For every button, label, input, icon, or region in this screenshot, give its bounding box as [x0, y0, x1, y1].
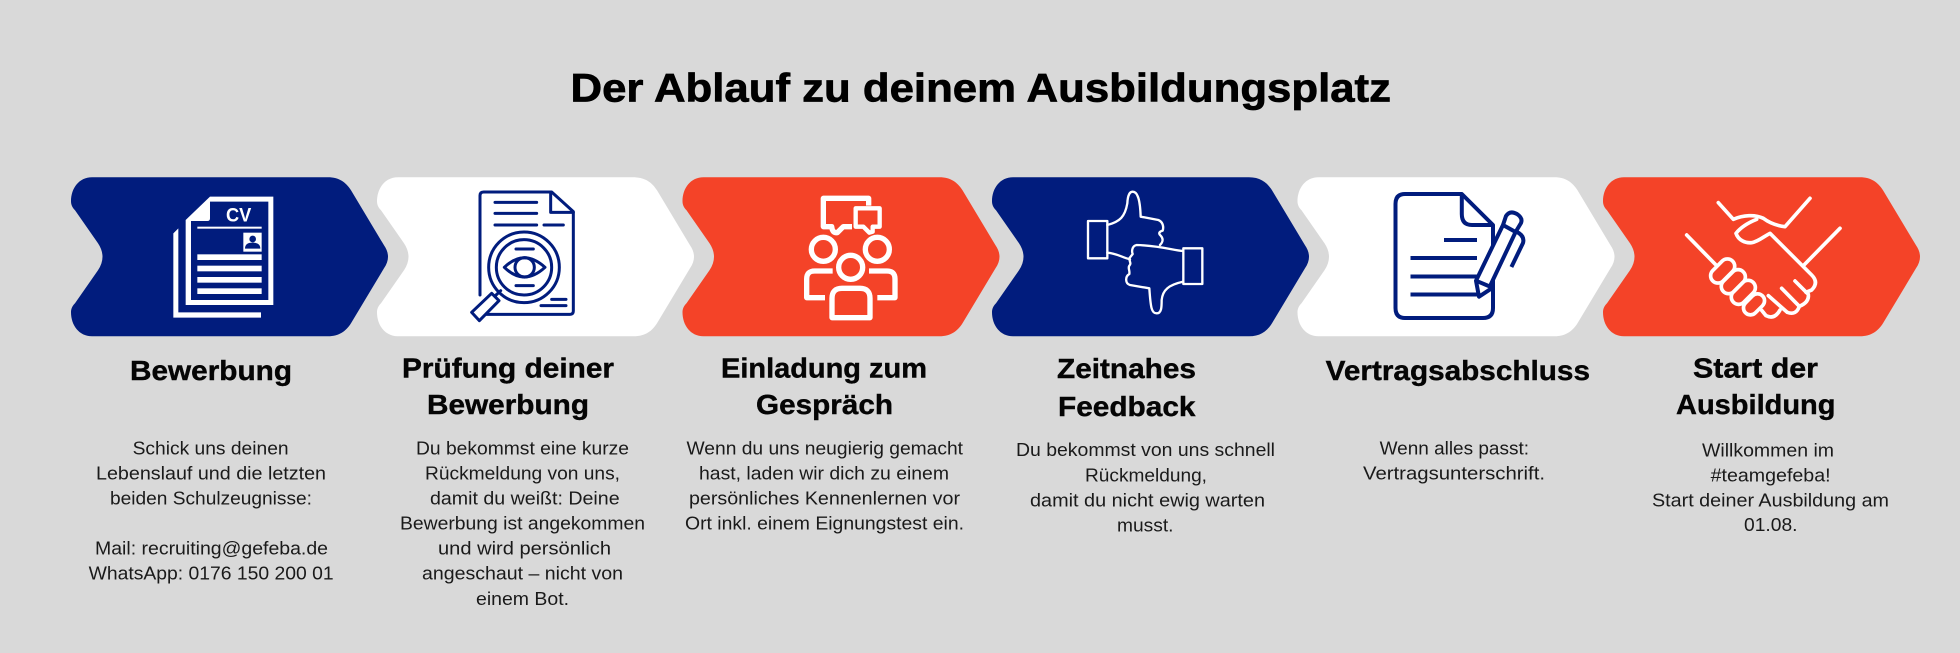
- chevron: step 6: [1603, 177, 1920, 336]
- icon: CV document: CV: [226, 206, 251, 227]
- text: step 1: [89, 437, 334, 583]
- heading: step 4: [1057, 353, 1196, 422]
- heading: step 6: Ausbildung: [1676, 389, 1836, 420]
- text: step 5: Wenn alles passt:: [1380, 437, 1529, 458]
- text: step 5: Vertragsunterschrift.: [1363, 462, 1545, 483]
- heading: step 3: Einladung zum: [721, 352, 927, 383]
- chevron: step 4: [992, 177, 1309, 336]
- text: step 4: damit du nicht ewig warten: [1030, 490, 1265, 511]
- icon: handshake: [1687, 198, 1840, 318]
- text: step 3: hast, laden wir dich zu einem: [699, 462, 949, 483]
- text: step 1: WhatsApp: 0176 150 200 01: [89, 562, 334, 583]
- title: Der Ablauf zu deinem Ausbildungsplatz: [570, 67, 1391, 111]
- text: step 2: [400, 437, 645, 609]
- heading: step 4: Zeitnahes: [1057, 353, 1196, 384]
- panel: step 1 Bewerbung: [71, 177, 388, 583]
- heading: step 3: Gespräch: [756, 389, 893, 420]
- panel: step 2 Pruefung: [377, 177, 694, 609]
- text: step 1: Mail: recruiting@gefeba.de: [95, 537, 328, 558]
- text: step 2: und wird persönlich: [438, 537, 611, 558]
- text: step 2: Bewerbung ist angekommen: [400, 512, 645, 533]
- text: step 2: angeschaut – nicht von: [422, 562, 623, 583]
- panel: step 4 Feedback: [992, 177, 1309, 536]
- heading: step 1: Bewerbung: [130, 355, 292, 386]
- icon: thumbs up and down: [1088, 192, 1202, 313]
- icon: document with magnifier and eye: [472, 192, 573, 321]
- text: step 6: Start deiner Ausbildung am: [1652, 490, 1889, 511]
- text: step 2: Du bekommst eine kurze: [416, 437, 629, 458]
- heading: step 3: [721, 352, 927, 420]
- chevron: step 1: [71, 177, 388, 336]
- heading: step 2: [402, 352, 614, 420]
- text: step 6: #teamgefeba!: [1711, 465, 1831, 486]
- icon: CV document: [173, 197, 273, 318]
- text: step 2: damit du weißt: Deine: [430, 487, 620, 508]
- text: step 2: Rückmeldung von uns,: [425, 462, 620, 483]
- heading: step 2: Prüfung deiner: [402, 352, 614, 383]
- text: step 3: Wenn du uns neugierig gemacht: [686, 437, 964, 458]
- heading: step 5: Vertragsabschluss: [1326, 355, 1590, 386]
- text: step 4: Rückmeldung,: [1085, 465, 1207, 486]
- text: step 5: [1363, 437, 1545, 483]
- chevron: step 2: [377, 177, 694, 336]
- text: step 2: einem Bot.: [476, 588, 569, 609]
- text: step 6: [1652, 440, 1889, 535]
- panel: step 5 Vertragsabschluss: [1298, 177, 1614, 483]
- text: step 1: Lebenslauf und die letzten: [96, 462, 326, 483]
- text: step 6: 01.08.: [1744, 514, 1798, 535]
- chevron: step 3: [682, 177, 1000, 336]
- heading: step 6: [1676, 352, 1836, 420]
- panel: step 3 Einladung: [682, 177, 1000, 533]
- text: step 1: beiden Schulzeugnisse:: [110, 487, 312, 508]
- text: step 3: persönliches Kennenlernen vor: [689, 487, 960, 508]
- icon: contract with pen: [1396, 194, 1523, 318]
- icon: group with speech bubbles: [807, 198, 895, 318]
- heading: step 6: Start der: [1693, 352, 1818, 383]
- text: step 4: musst.: [1117, 515, 1174, 536]
- text: step 4: Du bekommst von uns schnell: [1016, 439, 1275, 460]
- heading: step 2: Bewerbung: [427, 389, 589, 420]
- text: step 1: Schick uns deinen: [133, 437, 289, 458]
- text: step 3: Ort inkl. einem Eignungstest ein.: [685, 512, 964, 533]
- heading: step 4: Feedback: [1058, 391, 1196, 422]
- text: step 6: Willkommen im: [1702, 440, 1834, 461]
- text: step 3: [685, 437, 964, 533]
- panel: step 6 Start: [1603, 177, 1920, 535]
- text: step 4: [1016, 439, 1275, 536]
- chevron: step 5: [1298, 177, 1614, 336]
